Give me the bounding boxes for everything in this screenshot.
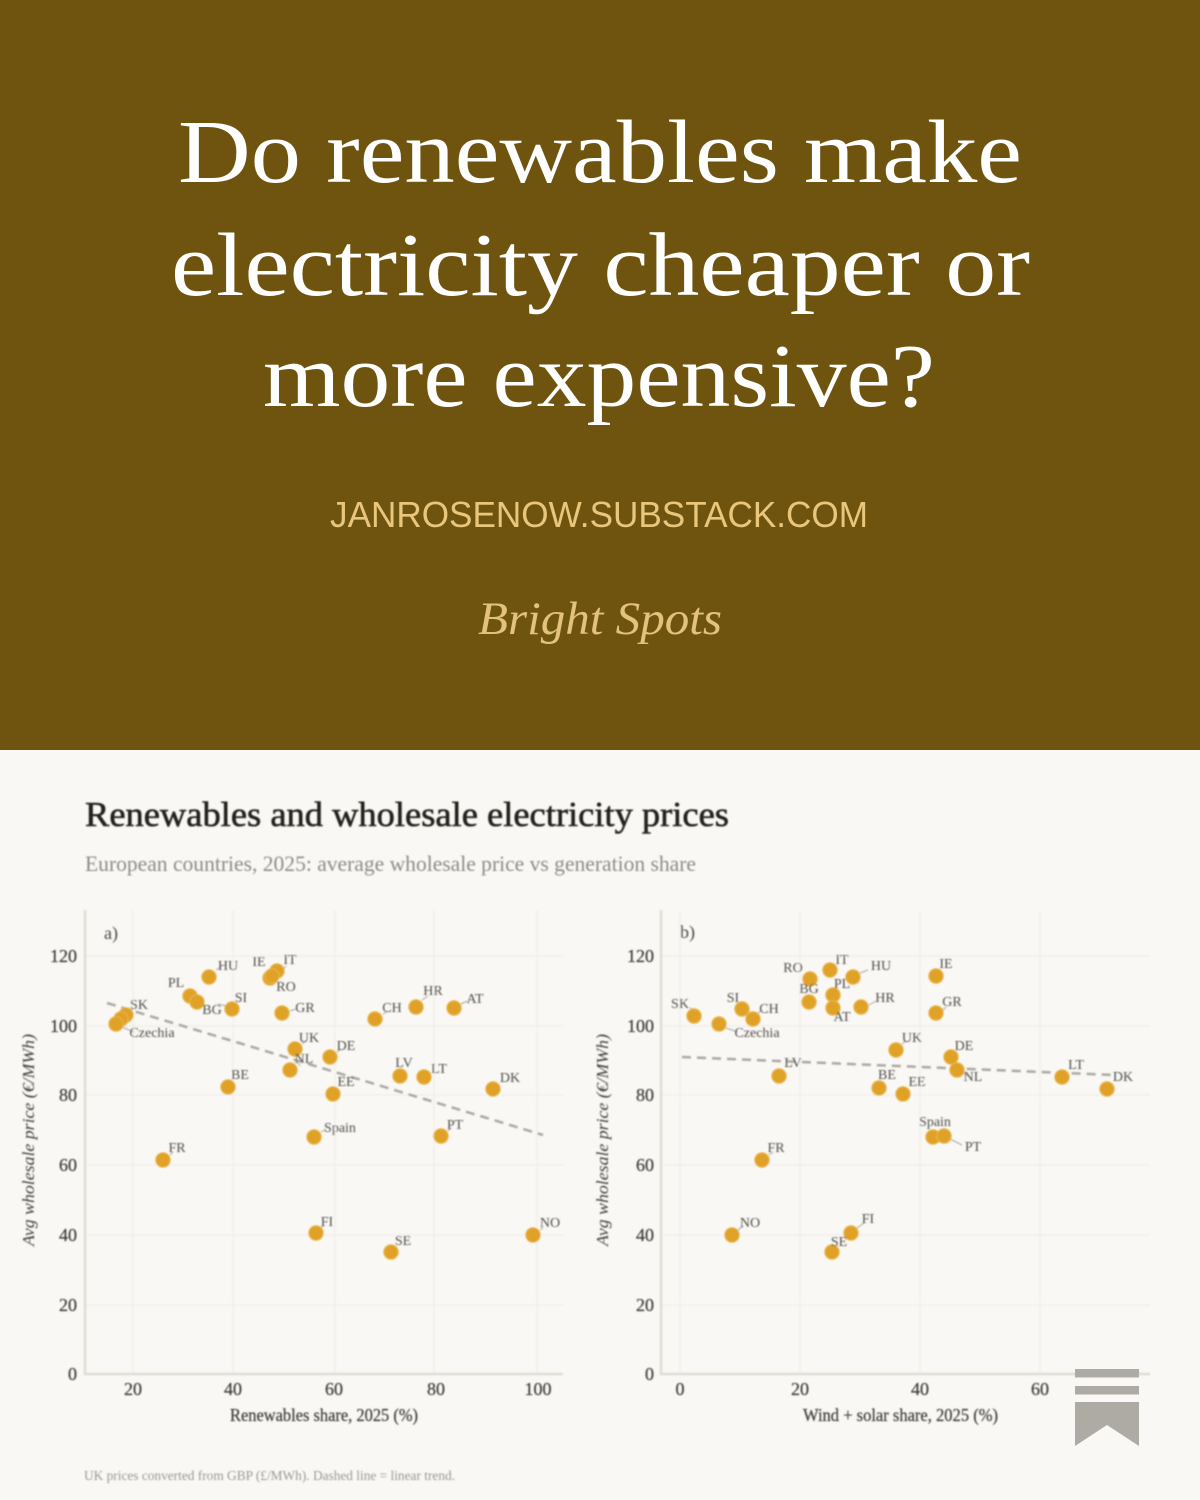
country labels b: HU (871, 959, 891, 974)
y axis ticks b: 100 (627, 1016, 654, 1036)
country labels a: NO (540, 1216, 560, 1231)
x axis ticks b (676, 1379, 1049, 1399)
country labels a: SK (130, 998, 148, 1013)
chart subtitle: European countries, 2025: average wholesale price vs generation share (85, 851, 696, 876)
panel: header (0, 0, 1200, 750)
country labels b: RO (783, 961, 803, 976)
country labels b: Spain (919, 1115, 951, 1130)
country labels b: DK (1113, 1070, 1133, 1085)
country labels a: GR (295, 1001, 315, 1016)
data points b (687, 963, 1114, 1259)
country labels b: AT (833, 1010, 851, 1025)
country labels a: IT (283, 953, 297, 968)
x axis ticks b: 60 (1031, 1379, 1049, 1399)
trend line a (107, 1003, 543, 1135)
country labels b: Czechia (734, 1026, 780, 1041)
x axis ticks a: 100 (524, 1379, 552, 1399)
country labels a: IE (252, 955, 266, 970)
icon: substack logo (1075, 1369, 1139, 1446)
y axis label b: Avg wholesale price (€/MWh) (593, 1034, 612, 1247)
country labels b: NO (740, 1216, 760, 1231)
country labels a: HU (218, 959, 238, 974)
country labels b: CH (759, 1002, 779, 1017)
country labels b: BG (799, 982, 819, 997)
y axis ticks a: 60 (59, 1155, 77, 1175)
country labels b: SE (831, 1235, 847, 1250)
y axis ticks a: 40 (59, 1225, 77, 1245)
country labels a: PT (447, 1118, 464, 1133)
country labels b: SI (727, 991, 740, 1006)
y axis ticks a: 0 (68, 1364, 77, 1384)
country labels a: CH (382, 1001, 402, 1016)
country labels b: EE (908, 1075, 926, 1090)
country labels b: NL (964, 1070, 982, 1085)
y axis ticks b: 20 (636, 1295, 654, 1315)
x axis ticks b: 40 (911, 1379, 929, 1399)
country labels b: GR (942, 995, 962, 1010)
country labels b: SK (671, 997, 689, 1012)
scatter chart a: renewables share (19, 910, 563, 1426)
country labels b: DE (955, 1039, 973, 1054)
footnote: UK prices converted from GBP (£/MWh). Dashed line = linear trend. (84, 1469, 455, 1484)
x axis label a: Renewables share, 2025 (%) (230, 1405, 418, 1426)
chart title: Renewables and wholesale electricity prices (85, 795, 729, 834)
leader lines a (122, 966, 543, 1230)
y axis ticks b (627, 946, 654, 1384)
panel: chart area (0, 750, 1200, 1500)
y axis ticks b: 0 (645, 1364, 654, 1384)
country labels a: LT (431, 1062, 447, 1077)
country labels b: IT (835, 953, 849, 968)
title (171, 103, 1030, 426)
data points a (109, 964, 540, 1259)
publication url: JANROSENOW.SUBSTACK.COM (330, 494, 868, 535)
panel letter a: a) (104, 923, 118, 944)
y axis ticks a (50, 946, 77, 1384)
trend line b (682, 1057, 1113, 1075)
x axis ticks a (124, 1379, 552, 1399)
country labels b: FR (767, 1141, 785, 1156)
country labels a: AT (466, 992, 484, 1007)
panel letter b: b) (680, 922, 695, 943)
x axis ticks a: 60 (325, 1379, 343, 1399)
country labels a: DE (337, 1039, 355, 1054)
x axis ticks b: 20 (791, 1379, 809, 1399)
country labels a: SE (395, 1234, 411, 1249)
y axis ticks a: 80 (59, 1085, 77, 1105)
title: electricity cheaper or (171, 216, 1030, 315)
leader lines b (690, 970, 968, 1230)
y axis ticks b: 60 (636, 1155, 654, 1175)
country labels b: PT (965, 1140, 982, 1155)
country labels a: DK (500, 1071, 520, 1086)
country labels a: Czechia (129, 1026, 175, 1041)
country labels b: BE (878, 1068, 896, 1083)
country labels b: UK (902, 1031, 922, 1046)
country labels a (129, 953, 560, 1249)
y axis ticks a: 120 (50, 946, 77, 966)
country labels a: Spain (324, 1121, 356, 1136)
title: more expensive? (263, 327, 935, 426)
country labels a: RO (276, 980, 296, 995)
country labels a: BG (202, 1003, 222, 1018)
country labels a: HR (423, 984, 443, 999)
country labels a: EE (337, 1075, 355, 1090)
x axis ticks a: 40 (224, 1379, 242, 1399)
country labels a: NL (295, 1052, 313, 1067)
scatter chart b: wind and solar share (593, 910, 1150, 1426)
x axis ticks a: 80 (427, 1379, 445, 1399)
country labels b: HR (875, 991, 895, 1006)
x axis ticks a: 20 (124, 1379, 142, 1399)
country labels b (671, 953, 1133, 1250)
country labels a: FI (321, 1215, 334, 1230)
y axis ticks b: 80 (636, 1085, 654, 1105)
country labels a: BE (231, 1068, 249, 1083)
country labels a: UK (299, 1031, 319, 1046)
country labels a: SI (235, 991, 248, 1006)
title: Do renewables make (178, 103, 1022, 202)
country labels b: IE (939, 957, 953, 972)
y axis ticks a: 100 (50, 1016, 77, 1036)
country labels a: PL (168, 976, 184, 991)
y axis label a: Avg wholesale price (€/MWh) (19, 1034, 38, 1247)
y axis ticks b: 40 (636, 1225, 654, 1245)
x axis label b: Wind + solar share, 2025 (%) (803, 1405, 998, 1426)
y axis ticks b: 120 (627, 946, 654, 966)
country labels b: LV (784, 1056, 802, 1071)
y axis ticks a: 20 (59, 1295, 77, 1315)
x axis ticks b: 0 (676, 1379, 684, 1399)
country labels a: LV (395, 1056, 413, 1071)
country labels b: LT (1068, 1058, 1084, 1073)
country labels a: FR (168, 1141, 186, 1156)
country labels b: FI (862, 1212, 875, 1227)
publication name: Bright Spots (478, 593, 722, 645)
country labels b: PL (834, 977, 850, 992)
